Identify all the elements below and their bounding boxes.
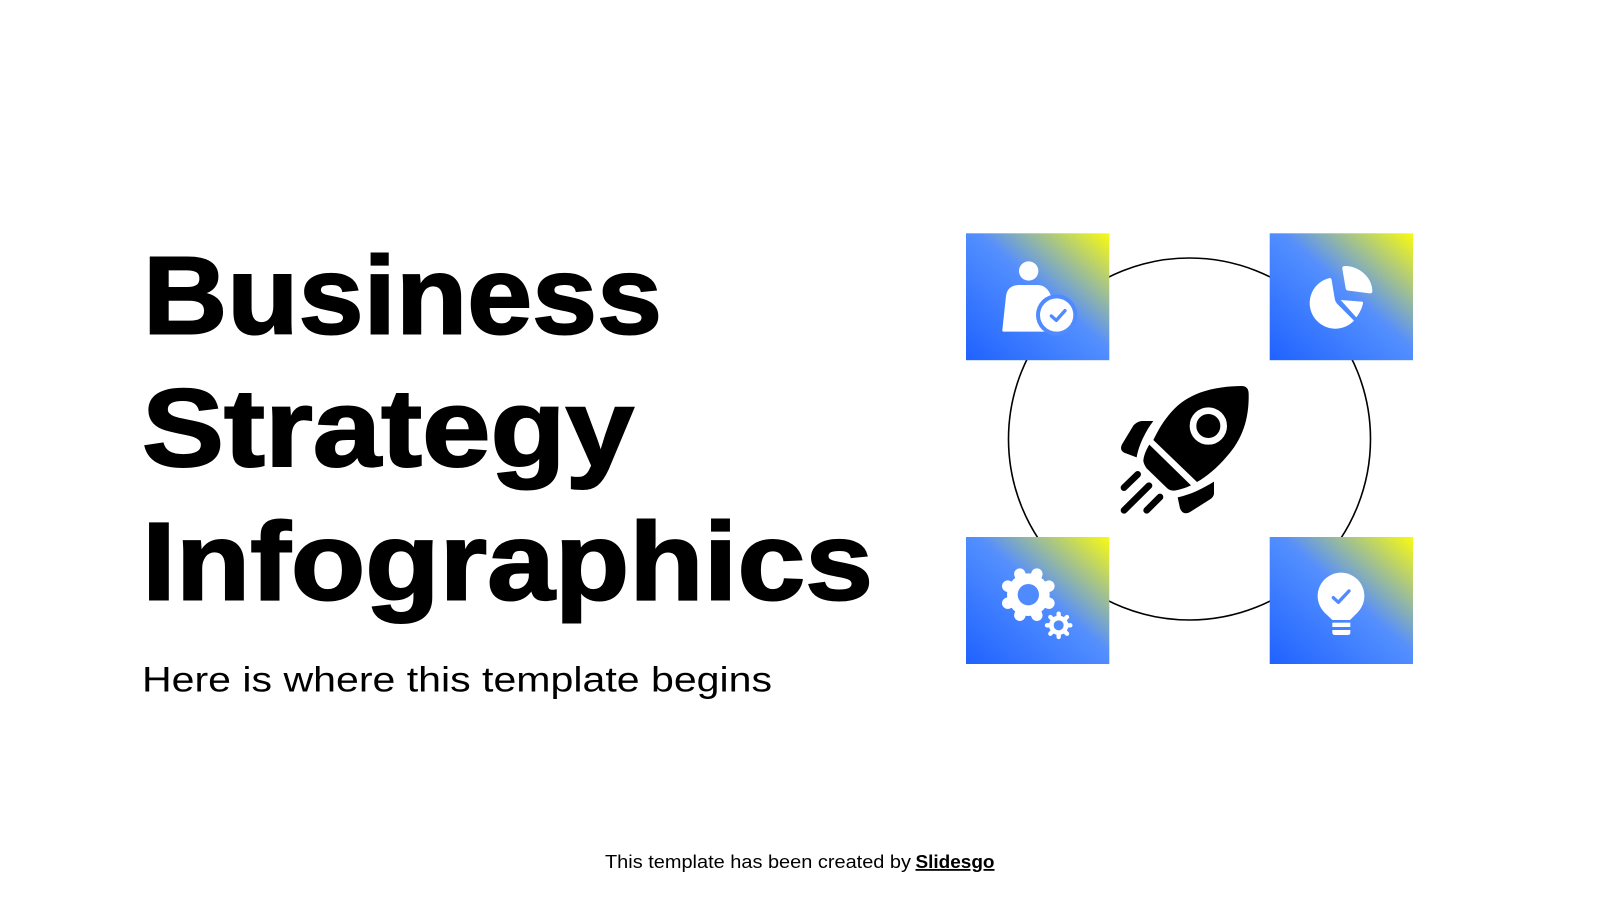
icon: light bulb with check [1318, 573, 1364, 635]
tile: top right [1270, 233, 1413, 360]
tile: bottom right [1270, 537, 1413, 664]
title line: Strategy: Strategy [142, 367, 634, 490]
credit text: This template has been created by [605, 852, 911, 872]
ring connecting the four tiles [1008, 258, 1370, 620]
icon: gears [1007, 573, 1070, 637]
tile: bottom left [966, 537, 1109, 664]
credit link: Slidesgo: Slidesgo [916, 852, 995, 872]
title line: Business: Business [143, 234, 662, 358]
icon: person with check badge [1002, 261, 1077, 336]
diagram: strategy cycle [966, 233, 1413, 664]
tile: top left [966, 233, 1109, 360]
title [142, 234, 873, 624]
title line: Infographics: Infographics [142, 500, 873, 624]
icon: pie chart [1310, 266, 1372, 329]
subtitle: Here is where this template begins [142, 660, 772, 700]
footer credit [605, 852, 995, 872]
icon: rocket [1121, 386, 1249, 513]
